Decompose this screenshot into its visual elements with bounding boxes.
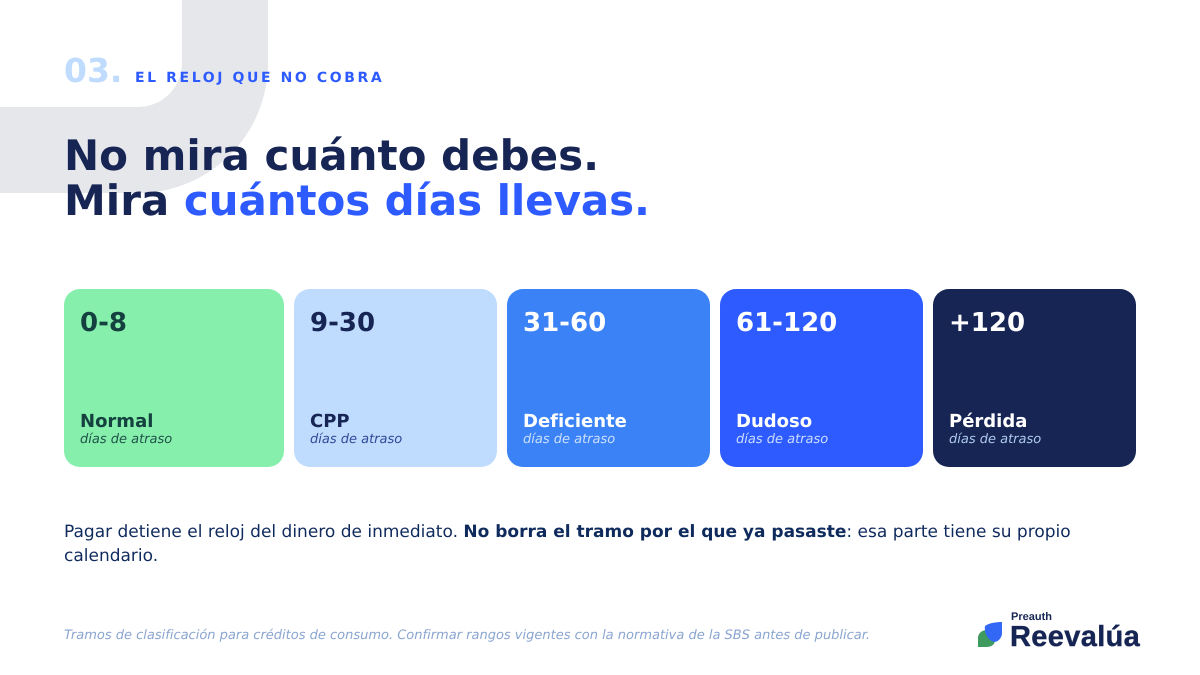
body paragraph: Pagar detiene el reloj del dinero de inmediato. No borra el tramo por el que ya pasaste: esa parte tiene su propio calendario. [64,522,1071,566]
label Dudoso: Dudoso [736,411,812,432]
card: Normal [64,289,284,467]
section number: 03. [64,51,122,90]
title: Mira cuántos días llevas. [64,176,650,225]
caption: días de atraso [736,432,828,447]
label CPP: CPP [310,411,350,432]
title [64,131,650,225]
label Pérdida: Pérdida [949,411,1027,432]
caption: días de atraso [310,432,402,447]
icon: logo leaves [978,622,1002,647]
logo overline: Preauth [1011,611,1052,623]
background corner shape [0,0,268,193]
logo [978,611,1140,653]
caption: días de atraso [523,432,615,447]
range +120: +120 [949,308,1025,338]
caption: días de atraso [949,432,1041,447]
range 0-8: 0-8 [80,308,127,338]
range 31-60: 31-60 [523,308,606,338]
card: Deficiente [507,289,710,467]
logo wordmark: Reevalúa [1010,621,1140,653]
footnote: Tramos de clasificación para créditos de consumo. Confirmar rangos vigentes con la normativa de la SBS antes de publicar. [64,628,870,643]
label Deficiente: Deficiente [523,411,627,432]
card: CPP [294,289,497,467]
range 61-120: 61-120 [736,308,837,338]
section label: EL RELOJ QUE NO COBRA [135,70,384,86]
title: No mira cuánto debes. [64,131,599,180]
card: Pérdida [933,289,1136,467]
card: Dudoso [720,289,923,467]
label Normal: Normal [80,411,153,432]
range 9-30: 9-30 [310,308,375,338]
caption: días de atraso [80,432,172,447]
